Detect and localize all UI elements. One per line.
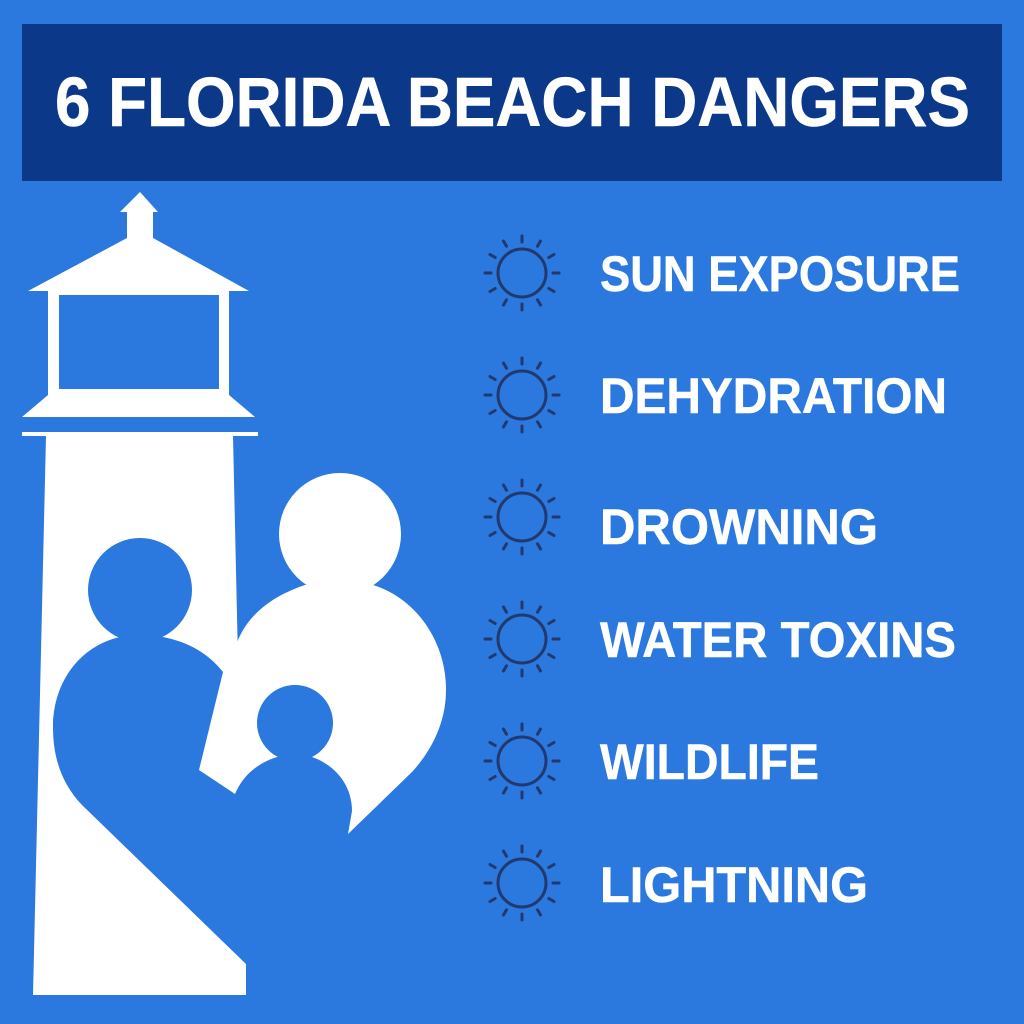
icon: sun — [485, 358, 559, 432]
icon: sun — [485, 236, 559, 310]
icon: sun — [485, 602, 559, 676]
list item: dehydration — [485, 358, 947, 432]
label: LIGHTNING — [600, 857, 868, 913]
white parent figure — [199, 473, 446, 834]
lighthouse gallery band — [22, 432, 258, 436]
list item: drowning — [485, 480, 878, 555]
list item: lightning — [485, 846, 868, 920]
label: WILDLIFE — [600, 734, 819, 790]
icon: sun — [485, 724, 559, 798]
icon: sun — [485, 480, 559, 554]
blue parent figure — [53, 538, 348, 964]
label: WATER TOXINS — [600, 612, 956, 668]
list item: water toxins — [485, 602, 956, 676]
label: DEHYDRATION — [600, 368, 947, 424]
title banner — [22, 24, 1002, 181]
list item: wildlife — [485, 724, 819, 798]
icon: sun — [485, 846, 559, 920]
list item: sun exposure — [485, 236, 960, 310]
label: SUN EXPOSURE — [600, 246, 960, 302]
label: DROWNING — [600, 499, 878, 555]
lighthouse and family logo — [22, 192, 446, 995]
lighthouse lantern — [22, 192, 255, 417]
blue child figure — [235, 685, 352, 850]
lighthouse tower — [33, 436, 246, 995]
